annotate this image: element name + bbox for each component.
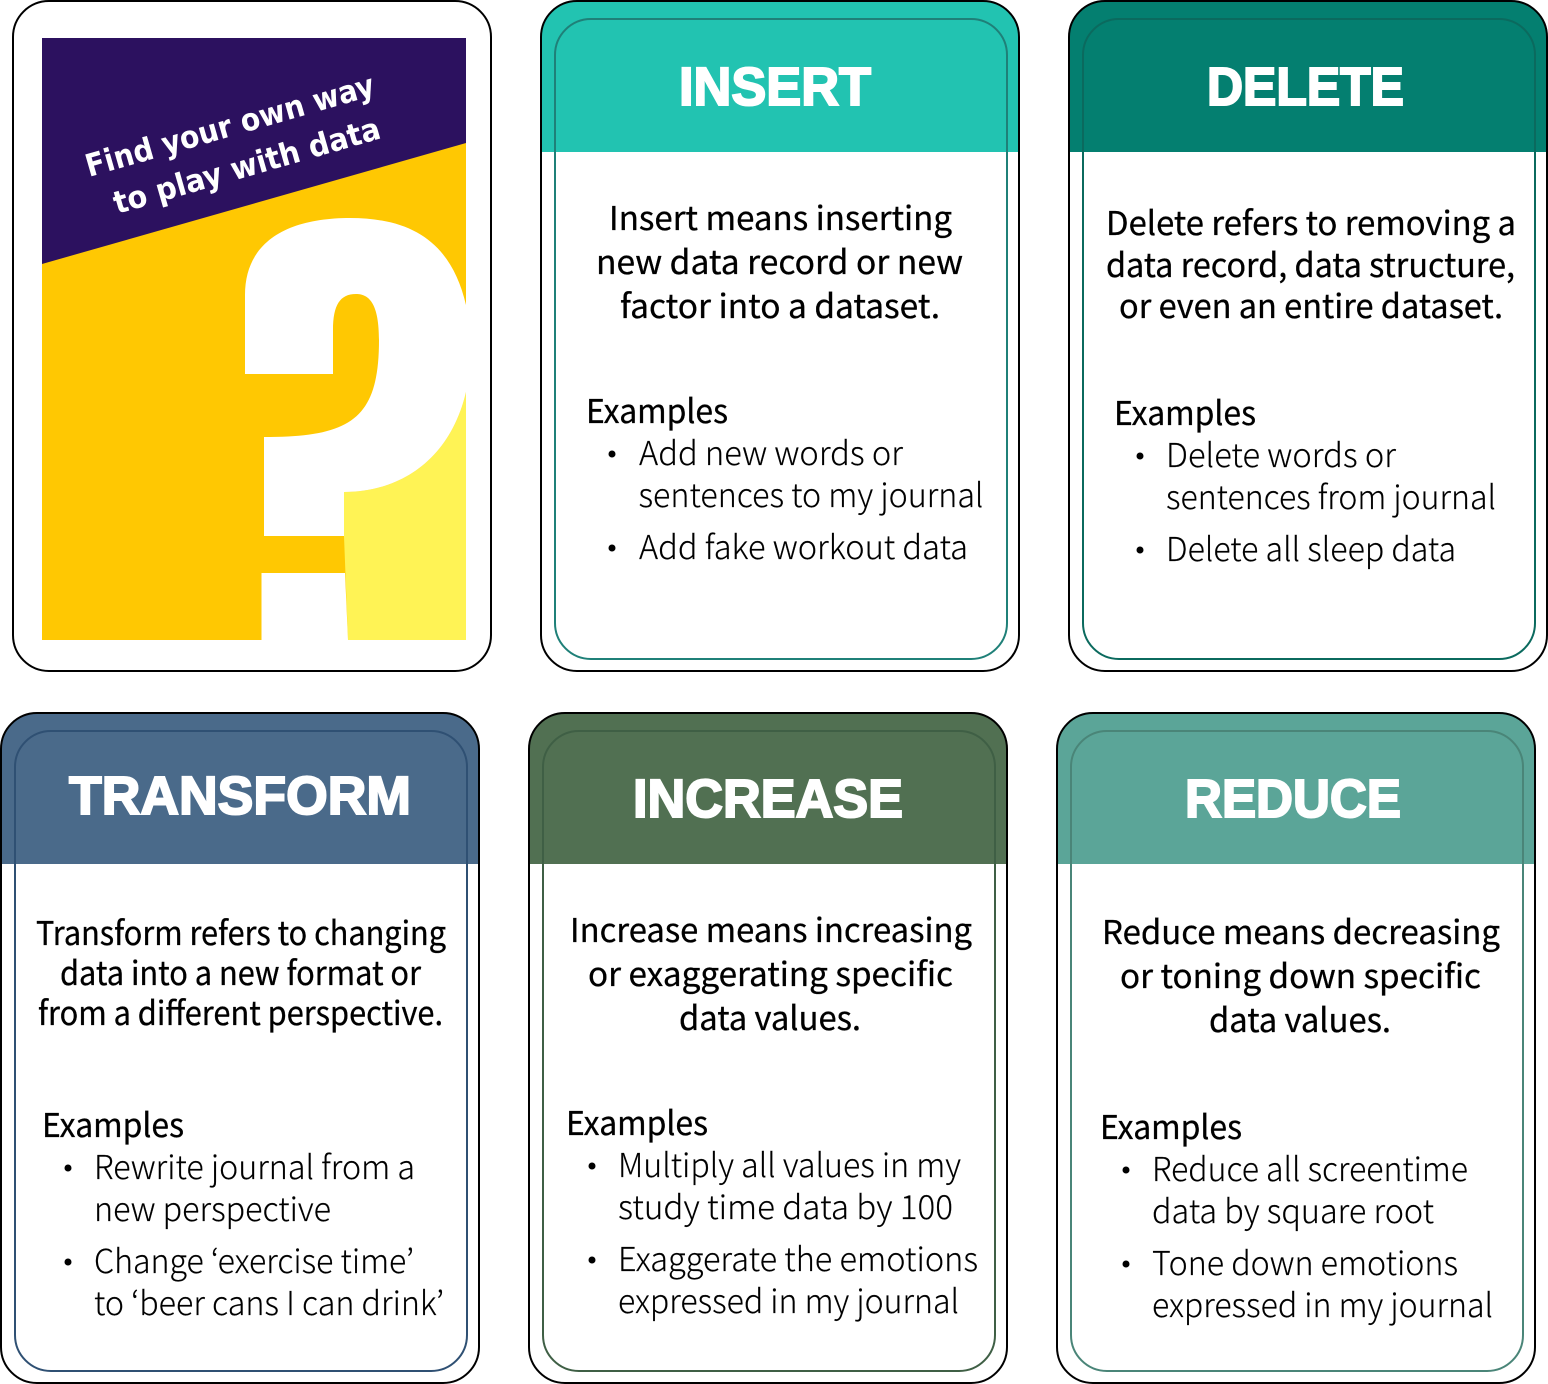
transform examples: Examples [42, 1099, 184, 1147]
reduce description: data values. [1209, 994, 1391, 1042]
increase description [570, 904, 972, 1040]
insert heading: INSERT [679, 57, 871, 117]
transform examples: Change ‘exercise time’ [94, 1235, 414, 1283]
insert description: factor into a dataset. [620, 280, 940, 328]
increase examples: Exaggerate the emotions [618, 1233, 978, 1281]
icon: question mark [245, 218, 466, 640]
increase heading: INCREASE [633, 769, 903, 829]
cover background [42, 38, 466, 640]
cover tagline: Find your own way [81, 68, 379, 185]
reduce examples: Tone down emotions [1152, 1237, 1458, 1285]
transform description [36, 907, 446, 1035]
delete heading: DELETE [1207, 57, 1404, 117]
increase description: Increase means increasing [570, 904, 972, 952]
insert examples [586, 385, 984, 569]
transform examples: new perspective [94, 1183, 331, 1231]
delete examples [1114, 387, 1496, 571]
increase description: or exaggerating specific [588, 948, 953, 996]
insert examples: Add fake workout data [639, 521, 968, 569]
panel: cover card [13, 1, 491, 671]
insert description [596, 192, 963, 328]
increase header band [529, 713, 1007, 864]
insert header band [541, 1, 1019, 152]
reduce heading: REDUCE [1185, 769, 1401, 829]
increase examples: Examples [566, 1097, 708, 1145]
transform description: Transform refers to changing [36, 907, 446, 955]
reduce examples: Reduce all screentime [1152, 1143, 1468, 1191]
reduce description [1102, 906, 1500, 1042]
cover tagline [81, 68, 385, 222]
increase examples [566, 1097, 978, 1323]
delete description: or even an entire dataset. [1119, 280, 1503, 328]
transform description: data into a new format or [60, 947, 421, 995]
reduce examples [1100, 1101, 1493, 1327]
increase examples: Multiply all values in my [618, 1139, 961, 1187]
cover banner [42, 38, 466, 264]
transform examples [42, 1099, 444, 1325]
delete examples: Examples [1114, 387, 1256, 435]
reduce description: or toning down specific [1120, 950, 1481, 998]
delete examples: Delete all sleep data [1166, 523, 1456, 571]
reduce header band [1057, 713, 1535, 864]
panel: transform [1, 713, 479, 1383]
insert examples: sentences to my journal [638, 469, 984, 517]
delete description [1106, 197, 1516, 328]
insert description: Insert means inserting [609, 192, 952, 240]
delete examples: sentences from journal [1166, 471, 1496, 519]
transform header band [1, 713, 479, 864]
panel: increase [529, 713, 1007, 1383]
transform examples: Rewrite journal from a [94, 1141, 415, 1189]
reduce examples: data by square root [1152, 1185, 1434, 1233]
insert examples: Add new words or [639, 427, 903, 475]
panel: reduce [1057, 713, 1535, 1383]
increase examples: study time data by 100 [618, 1181, 953, 1229]
increase description: data values. [679, 992, 861, 1040]
transform heading: TRANSFORM [69, 766, 411, 826]
panel: insert [541, 1, 1019, 671]
insert description: new data record or new [596, 236, 963, 284]
transform examples: to ‘beer cans I can drink’ [94, 1277, 444, 1325]
delete examples: Delete words or [1166, 429, 1396, 477]
delete description: data record, data structure, [1106, 239, 1515, 287]
panel: delete [1069, 1, 1547, 671]
reduce examples: Examples [1100, 1101, 1242, 1149]
cover tagline: to play with data [109, 111, 385, 222]
delete description: Delete refers to removing a [1106, 197, 1516, 245]
increase examples: expressed in my journal [618, 1275, 959, 1323]
transform description: from a different perspective. [38, 987, 443, 1035]
reduce examples: expressed in my journal [1152, 1279, 1493, 1327]
delete header band [1069, 1, 1547, 152]
reduce description: Reduce means decreasing [1102, 906, 1500, 954]
insert examples: Examples [586, 385, 728, 433]
